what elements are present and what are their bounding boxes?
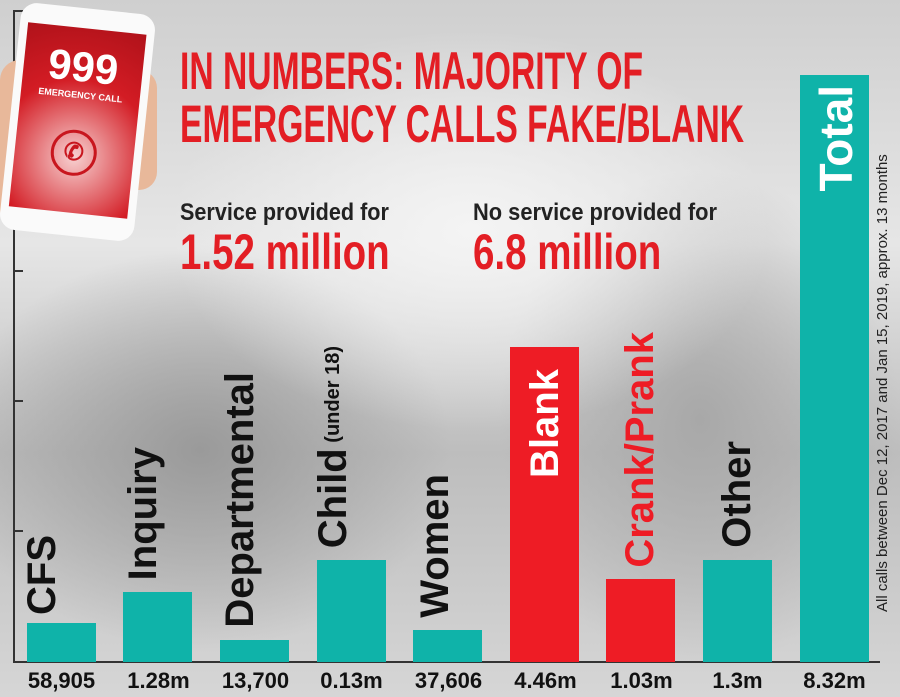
bar: Inquiry	[123, 592, 192, 662]
values row: 4.46m	[514, 668, 577, 693]
label: Women: Women	[413, 474, 457, 618]
bar: Blank	[510, 347, 579, 662]
values row: 58,905	[28, 668, 95, 693]
values row: 8.32m	[803, 668, 866, 693]
stat: service provided	[180, 199, 390, 280]
label: Departmental: Departmental	[218, 372, 262, 628]
icon: phone in hand: EMERGENCY CALL	[38, 86, 123, 105]
title	[180, 42, 744, 154]
axis	[13, 10, 15, 663]
values row: 13,700	[222, 668, 289, 693]
label: Total: Total	[810, 85, 862, 191]
values row: 1.03m	[610, 668, 673, 693]
stat: no service	[473, 199, 717, 280]
title: IN NUMBERS: MAJORITY OF	[180, 42, 643, 101]
bar: Crank/Prank	[606, 579, 675, 662]
title: EMERGENCY CALLS FAKE/BLANK	[180, 95, 744, 154]
values row: 1.28m	[127, 668, 190, 693]
bar: Departmental	[220, 640, 289, 662]
values row: 37,606	[415, 668, 482, 693]
label: Crank/Prank: Crank/Prank	[618, 332, 662, 568]
stat: no service: 6.8 million	[473, 224, 661, 280]
note: date range: All calls between Dec 12, 2017 and Jan 15, 2019, approx. 13 months	[874, 154, 891, 612]
label: Blank: Blank	[523, 369, 567, 478]
bar: CFS	[27, 623, 96, 662]
bar: Child	[317, 560, 386, 662]
bar: Women	[413, 630, 482, 662]
values row: 1.3m	[712, 668, 763, 693]
icon: phone in hand: ✆	[62, 138, 85, 167]
bar: Other	[703, 560, 772, 662]
icon: phone in hand	[0, 3, 157, 241]
label: Other: Other	[715, 441, 759, 548]
icon: phone in hand: 999	[46, 40, 121, 94]
label: CFS: CFS	[20, 535, 64, 615]
bar: Total	[800, 75, 869, 662]
stat: service provided: 1.52 million	[180, 224, 390, 280]
label: Child: Child (under 18)	[311, 346, 355, 548]
stat: service provided: Service provided for	[180, 199, 389, 226]
label: Inquiry: Inquiry	[121, 447, 165, 580]
values row: 0.13m	[320, 668, 383, 693]
stat: no service: No service provided for	[473, 199, 717, 226]
